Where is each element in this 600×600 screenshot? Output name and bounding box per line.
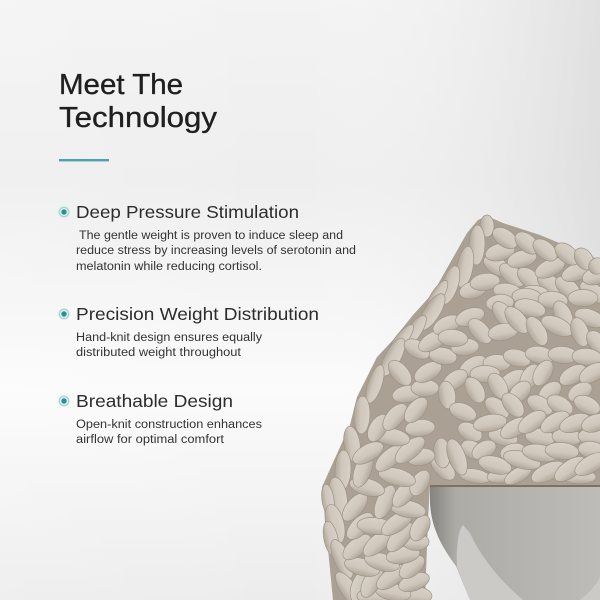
- feature: Deep Pressure Stimulation: [58, 202, 356, 273]
- feature: Precision Weight Distribution: [58, 304, 319, 359]
- hanging braid: [338, 393, 436, 600]
- text block: distributed weight throughout: [76, 347, 242, 359]
- icon: bullet: [58, 206, 70, 218]
- text block: Open-knit construction enhances: [76, 419, 262, 431]
- text block: reduce stress by increasing levels of serotonin and: [76, 245, 356, 257]
- title: Meet The: [59, 69, 183, 101]
- icon: bullet: [58, 396, 70, 406]
- outer strand: [320, 215, 494, 600]
- heading: Precision Weight Distribution: [76, 304, 319, 324]
- blanket silhouette: [322, 216, 600, 600]
- title: Technology: [59, 102, 218, 134]
- text block: The gentle weight is proven to induce sleep and: [79, 230, 343, 242]
- coil braid: [384, 287, 600, 405]
- text block: melatonin while reducing cortisol.: [76, 261, 262, 273]
- text block: [76, 230, 356, 273]
- feature: Breathable Design: [58, 391, 262, 446]
- inner coil braid: [436, 344, 600, 449]
- icon: bullet: [58, 308, 70, 320]
- text block: airflow for optimal comfort: [76, 434, 225, 446]
- top braid: [457, 223, 600, 308]
- knitted blanket: [320, 215, 600, 600]
- lower braid on bowl rim: [426, 436, 600, 489]
- text block: Hand-knit design ensures equally: [76, 332, 262, 344]
- heading: Deep Pressure Stimulation: [76, 202, 299, 222]
- accent rule: [59, 159, 109, 161]
- text block: [76, 332, 262, 359]
- heading: Breathable Design: [76, 391, 233, 411]
- text block: [76, 419, 262, 446]
- concrete bowl: [430, 484, 600, 600]
- title: [59, 69, 218, 134]
